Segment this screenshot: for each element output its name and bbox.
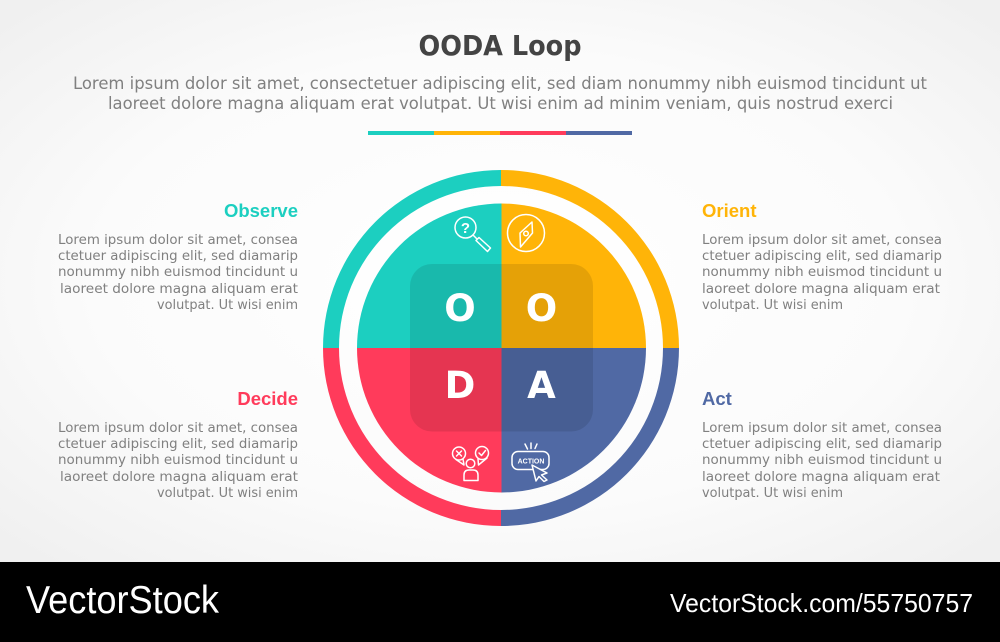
heading: observe: Observe — [224, 200, 298, 221]
body: act: ctetuer adipiscing elit, sed diamarip — [702, 437, 942, 452]
subtitle text: laoreet dolore magna aliquam erat volutpat. Ut wisi enim ad minim veniam, quis nostrud exerci — [108, 94, 893, 114]
body: decide: volutpat. Ut wisi enim — [157, 486, 298, 501]
letter A act: A — [527, 364, 556, 407]
heading: orient: Orient — [702, 200, 756, 221]
panel: act — [702, 388, 942, 501]
body: observe: nonummy nibh euismod tincidunt u — [58, 265, 298, 280]
body: act: volutpat. Ut wisi enim — [702, 486, 843, 501]
icon: decision person — [452, 446, 488, 480]
watermark logo: VectorStock — [26, 579, 219, 622]
body: decide — [58, 421, 298, 501]
letter D decide: D — [445, 364, 475, 407]
body: observe: ctetuer adipiscing elit, sed diamarip — [58, 249, 298, 264]
body: observe: Lorem ipsum dolor sit amet, consea — [58, 233, 298, 248]
heading: decide: Decide — [237, 388, 298, 409]
body: act: laoreet dolore magna aliquam erat — [702, 470, 940, 485]
body: observe — [58, 233, 298, 313]
colored divider — [368, 131, 632, 135]
letter O orient: O — [526, 287, 557, 330]
watermark bar — [0, 562, 1000, 642]
body: observe: laoreet dolore magna aliquam erat — [60, 282, 298, 297]
body: decide: laoreet dolore magna aliquam erat — [60, 470, 298, 485]
body: orient: laoreet dolore magna aliquam erat — [702, 282, 940, 297]
panel: observe — [58, 200, 298, 313]
panel: orient — [702, 200, 942, 313]
body: orient: nonummy nibh euismod tincidunt u — [702, 265, 942, 280]
body: act: Lorem ipsum dolor sit amet, consea — [702, 421, 942, 436]
letter O observe: O — [444, 287, 476, 330]
panel: decide — [58, 388, 298, 501]
icon: compass — [508, 214, 544, 252]
subtitle text: Lorem ipsum dolor sit amet, consectetuer adipiscing elit, sed diam nonummy nibh euismod tincidunt ut — [73, 74, 927, 94]
body: orient — [702, 233, 942, 313]
body: decide: ctetuer adipiscing elit, sed diamarip — [58, 437, 298, 452]
body: observe: volutpat. Ut wisi enim — [157, 298, 298, 313]
body: orient: volutpat. Ut wisi enim — [702, 298, 843, 313]
center rounded square — [410, 264, 593, 432]
icon: magnifier question — [455, 217, 490, 252]
body: decide: Lorem ipsum dolor sit amet, consea — [58, 421, 298, 436]
outer ring — [323, 170, 679, 526]
watermark url: VectorStock.com/55750757 — [670, 588, 973, 618]
icon: magnifier question: ? — [461, 220, 470, 237]
title: OODA Loop — [418, 30, 582, 62]
body: orient: ctetuer adipiscing elit, sed diamarip — [702, 249, 942, 264]
icon: action button cursor — [512, 443, 549, 482]
inner pie — [357, 204, 646, 492]
heading: act: Act — [702, 388, 732, 409]
body: act: nonummy nibh euismod tincidunt u — [702, 453, 942, 468]
body: act — [702, 421, 942, 501]
icon: action button cursor: ACTION — [518, 458, 544, 466]
subtitle text — [73, 74, 927, 114]
body: orient: Lorem ipsum dolor sit amet, consea — [702, 233, 942, 248]
body: decide: nonummy nibh euismod tincidunt u — [58, 453, 298, 468]
